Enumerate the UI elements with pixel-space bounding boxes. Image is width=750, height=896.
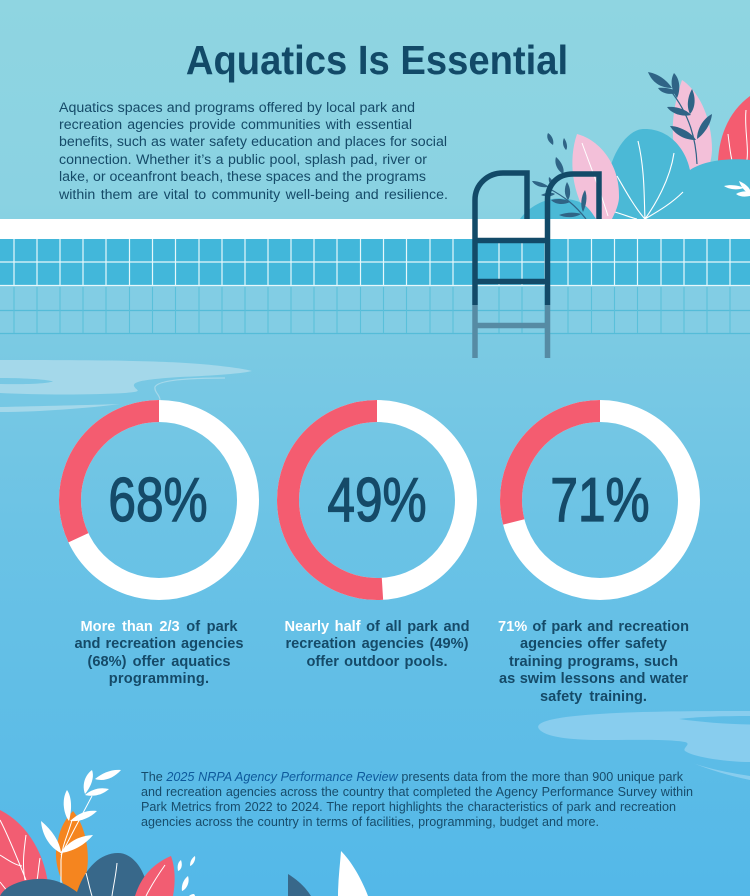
caption 49%: recreation agencies (49%): [286, 636, 468, 652]
caption 49%: Nearly half of all park and: [284, 618, 470, 634]
footer note: Park Metrics from 2022 to 2024. The report highlights the characteristics of park and recreation: [141, 800, 676, 814]
pool ladder: [475, 173, 599, 358]
caption 68%: (68%) offer aquatics: [88, 654, 230, 670]
caption 71%: as swim lessons and water: [499, 671, 688, 687]
teal bush: [607, 129, 750, 219]
footer note: and recreation agencies across the country that completed the Agency Performance Survey within: [141, 784, 693, 798]
bottom left foliage: [0, 770, 195, 896]
footer note: agencies across the country in terms of facilities, programming, budget and more.: [141, 814, 599, 828]
pool coping: [0, 219, 750, 239]
red leaf: [0, 810, 49, 896]
pink leaf upper: [673, 80, 712, 190]
lower sprig: [532, 133, 586, 219]
footer note: [141, 770, 693, 828]
plants behind the pool edge: [520, 72, 750, 219]
stat 49%: 49%: [327, 466, 427, 534]
donut 49: [288, 411, 466, 589]
stat 68%: 68%: [108, 466, 208, 534]
water ripple left: [0, 360, 252, 412]
intro paragraph: lake, or oceanfront beach, these spaces and the programs: [59, 169, 426, 185]
caption 49%: [284, 618, 470, 670]
caption 68%: [74, 618, 244, 687]
caption 71%: safety training.: [540, 689, 647, 705]
dark bushes: [0, 853, 148, 896]
ladder reflection: [475, 305, 548, 358]
red leaf: [718, 96, 750, 175]
caption 71%: training programs, such: [509, 654, 678, 670]
bottom centre leaves: [288, 851, 368, 896]
caption 71%: 71% of park and recreation: [498, 618, 689, 634]
white sprig: [41, 770, 121, 855]
small white leaf sprig: [724, 181, 750, 197]
tile reflection: [0, 287, 750, 334]
caption 49%: offer outdoor pools.: [306, 654, 448, 670]
intro paragraph: within them are vital to community well-being and resilience.: [59, 187, 448, 203]
intro paragraph: benefits, such as water safety education and places for social: [59, 134, 447, 150]
stat 71%: 71%: [550, 466, 650, 534]
caption 68%: and recreation agencies: [74, 636, 244, 652]
caption 68%: programming.: [109, 671, 209, 687]
intro paragraph: connection. Whether it’s a public pool, splash pad, river or: [59, 152, 427, 168]
pink leaf lower: [572, 134, 619, 219]
upper sprig: [648, 72, 712, 164]
donut 71: [511, 411, 689, 589]
white drops: [178, 856, 195, 896]
title: Aquatics Is Essential: [185, 37, 568, 83]
caption 71%: agencies offer safety: [520, 636, 667, 652]
intro paragraph: [59, 100, 448, 203]
donut 68: [70, 411, 248, 589]
footer note: The 2025 NRPA Agency Performance Review presents data from the more than 900 unique park: [141, 770, 683, 784]
orange leaf: [56, 811, 88, 896]
caption 68%: More than 2/3 of park: [80, 618, 237, 634]
teal mound small: [520, 198, 596, 219]
red small leaf: [135, 856, 175, 896]
tile band: [0, 239, 750, 286]
water ripple right: [538, 711, 750, 780]
intro paragraph: Aquatics spaces and programs offered by local park and: [59, 100, 415, 116]
caption 71%: [498, 618, 689, 705]
intro paragraph: recreation agencies provide communities with essential: [59, 117, 412, 133]
